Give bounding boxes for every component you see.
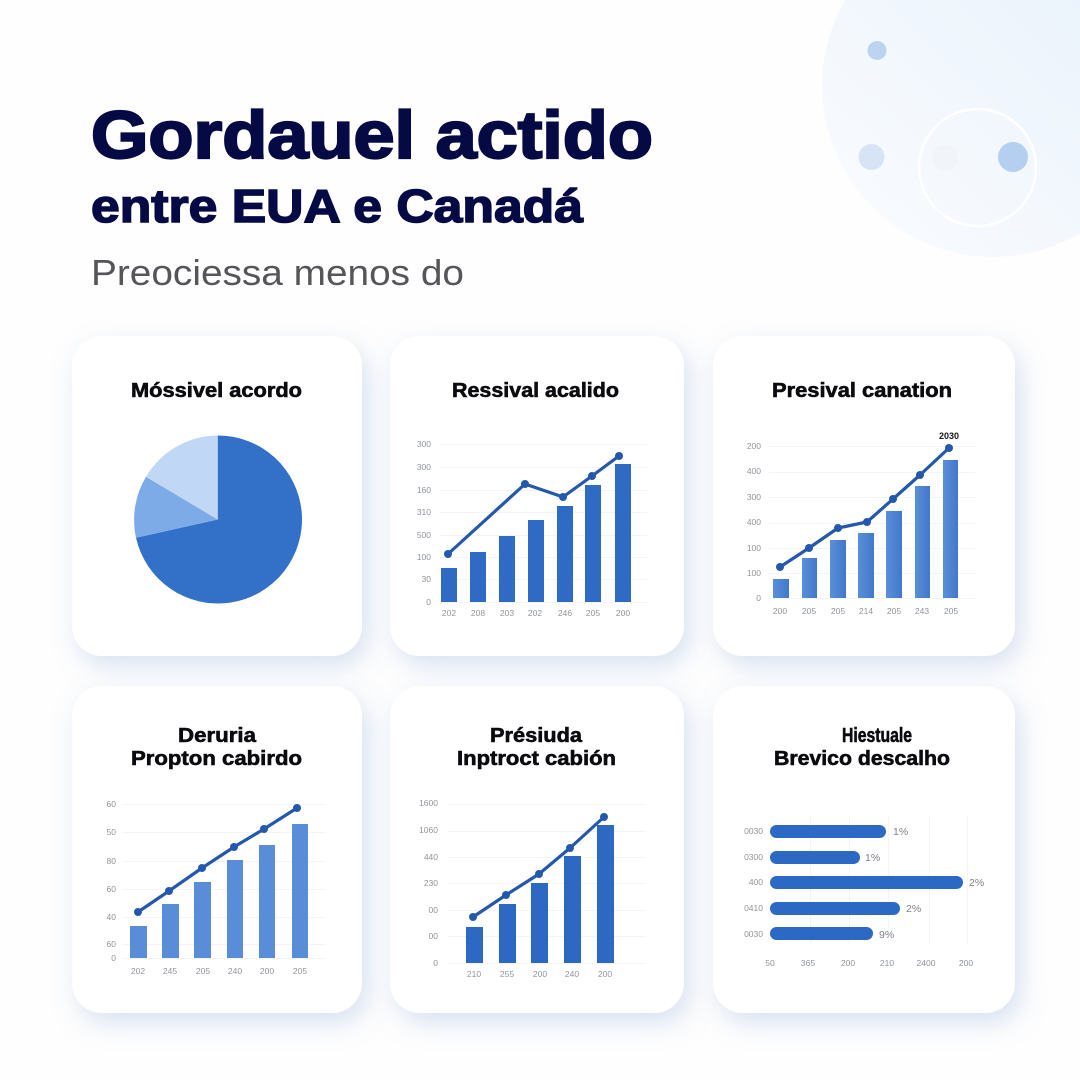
dot: left (858, 144, 884, 170)
y axis labels: 80 (107, 856, 116, 866)
y axis labels: 60 (107, 884, 116, 894)
trend line (134, 804, 301, 916)
x axis labels: 240 (228, 966, 242, 976)
x axis labels: 200 (598, 969, 612, 979)
value labels: 9% (879, 929, 894, 941)
y axis labels: 60 (107, 799, 116, 809)
y axis labels: 400 (747, 466, 761, 476)
y axis labels: 300 (747, 492, 761, 502)
card title: Hiestuale (842, 725, 912, 747)
panel: horizontal bar chart card 6 (713, 686, 1015, 1013)
card title: Móssivel acordo (131, 380, 302, 402)
x axis labels: 205 (586, 608, 600, 618)
x axis labels: 200 (260, 966, 274, 976)
bars (130, 824, 308, 958)
bar and line chart (747, 431, 975, 616)
card title: Inptroct cabión (457, 748, 616, 770)
slice: large (136, 435, 302, 603)
dot: faint (932, 145, 958, 171)
x axis labels (131, 966, 307, 976)
category labels: 0300 (744, 852, 763, 862)
x axis labels: 255 (500, 969, 514, 979)
subtitle: Preociessa menos do (91, 252, 464, 293)
x axis labels: 203 (500, 608, 514, 618)
x axis labels: 210 (467, 969, 481, 979)
x axis labels: 200 (841, 958, 855, 968)
y axis labels: 00 (429, 931, 438, 941)
y axis labels: 100 (747, 543, 761, 553)
x axis labels: 205 (887, 606, 901, 616)
value labels: 1% (893, 826, 908, 838)
bars (773, 460, 958, 598)
y axis labels: 400 (747, 517, 761, 527)
card title: Propton cabirdo (131, 748, 302, 770)
y axis labels: 300 (417, 462, 431, 472)
x axis labels: 200 (959, 958, 973, 968)
card title: Presival canation (772, 380, 952, 402)
x axis labels: 245 (163, 966, 177, 976)
trend line (469, 813, 608, 921)
x axis labels: 2400 (917, 958, 936, 968)
y axis labels (747, 441, 761, 603)
y axis labels: 310 (417, 507, 431, 517)
panel: combo chart card 3 (713, 336, 1015, 656)
bar and line chart (417, 439, 647, 618)
x axis labels: 205 (944, 606, 958, 616)
value labels: 2% (906, 903, 921, 915)
panel: combo chart card 2 (390, 336, 684, 656)
card title: Présiuda (490, 725, 583, 747)
y axis labels (419, 798, 438, 968)
slice: medium (134, 477, 218, 538)
category labels: 0030 (744, 929, 763, 939)
x axis labels: 50 (765, 958, 775, 968)
title (91, 98, 653, 293)
y axis labels: 50 (107, 827, 116, 837)
x axis labels (765, 958, 973, 968)
x axis labels: 200 (533, 969, 547, 979)
slice: small (146, 436, 218, 520)
dot: top (868, 41, 886, 60)
y axis labels: 0 (111, 953, 116, 963)
y axis labels: 1060 (419, 825, 438, 835)
value labels: 2% (969, 877, 984, 889)
x axis labels: 365 (801, 958, 815, 968)
x axis labels: 205 (293, 966, 307, 976)
card title (457, 725, 616, 770)
x axis labels (442, 608, 630, 618)
y axis labels: 440 (424, 852, 438, 862)
title line 1: Gordauel actido (91, 98, 653, 173)
y axis labels: 1600 (419, 798, 438, 808)
x axis labels: 246 (558, 608, 572, 618)
trend line (444, 452, 623, 558)
y axis labels: 0 (756, 593, 761, 603)
trend line (776, 444, 953, 571)
x axis labels: 200 (616, 608, 630, 618)
x axis labels: 202 (528, 608, 542, 618)
card title: Deruria (178, 725, 257, 747)
x axis labels: 208 (471, 608, 485, 618)
y axis labels: 100 (417, 552, 431, 562)
panel: combo chart card 5 (390, 686, 684, 1013)
category labels (744, 826, 763, 939)
y axis labels: 160 (417, 485, 431, 495)
decorative circle group (822, 0, 1080, 257)
value labels: 1% (865, 852, 880, 864)
y axis labels: 230 (424, 878, 438, 888)
x axis labels: 200 (773, 606, 787, 616)
y axis labels: 100 (747, 568, 761, 578)
x axis labels (773, 606, 958, 616)
panel: combo chart card 4 (72, 686, 362, 1013)
callout label: 2030 (939, 431, 959, 441)
horizontal bar chart (744, 815, 984, 968)
y axis labels: 40 (107, 912, 116, 922)
y axis labels: 300 (417, 439, 431, 449)
ring (919, 109, 1036, 226)
y axis labels: 500 (417, 530, 431, 540)
panel: pie chart card (72, 336, 362, 656)
y axis labels: 00 (429, 905, 438, 915)
bars (770, 825, 963, 940)
card title: Ressival acalido (452, 380, 619, 402)
x axis labels: 202 (442, 608, 456, 618)
y axis labels: 60 (107, 939, 116, 949)
category labels: 0030 (744, 826, 763, 836)
x axis labels: 205 (802, 606, 816, 616)
x axis labels: 205 (831, 606, 845, 616)
bars (441, 464, 631, 602)
bar and line chart (419, 798, 645, 979)
pie chart (134, 435, 302, 603)
y axis labels: 200 (747, 441, 761, 451)
x axis labels: 210 (880, 958, 894, 968)
dot: right (998, 142, 1028, 172)
large pale circle (822, 0, 1080, 257)
bars (466, 825, 614, 963)
y axis labels (107, 799, 116, 963)
card title (131, 725, 302, 770)
x axis labels: 240 (565, 969, 579, 979)
y axis labels: 0 (426, 597, 431, 607)
card title (774, 725, 950, 770)
x axis labels: 202 (131, 966, 145, 976)
y axis labels: 0 (433, 958, 438, 968)
x axis labels (467, 969, 612, 979)
x axis labels: 214 (859, 606, 873, 616)
category labels: 400 (749, 877, 763, 887)
value labels (865, 826, 984, 941)
category labels: 0410 (744, 903, 763, 913)
card title: Brevico descalho (774, 748, 950, 770)
title line 2: entre EUA e Canadá (91, 180, 583, 232)
y axis labels: 30 (422, 574, 431, 584)
x axis labels: 205 (196, 966, 210, 976)
bar and line chart (107, 799, 325, 976)
x axis labels: 243 (915, 606, 929, 616)
y axis labels (417, 439, 431, 607)
